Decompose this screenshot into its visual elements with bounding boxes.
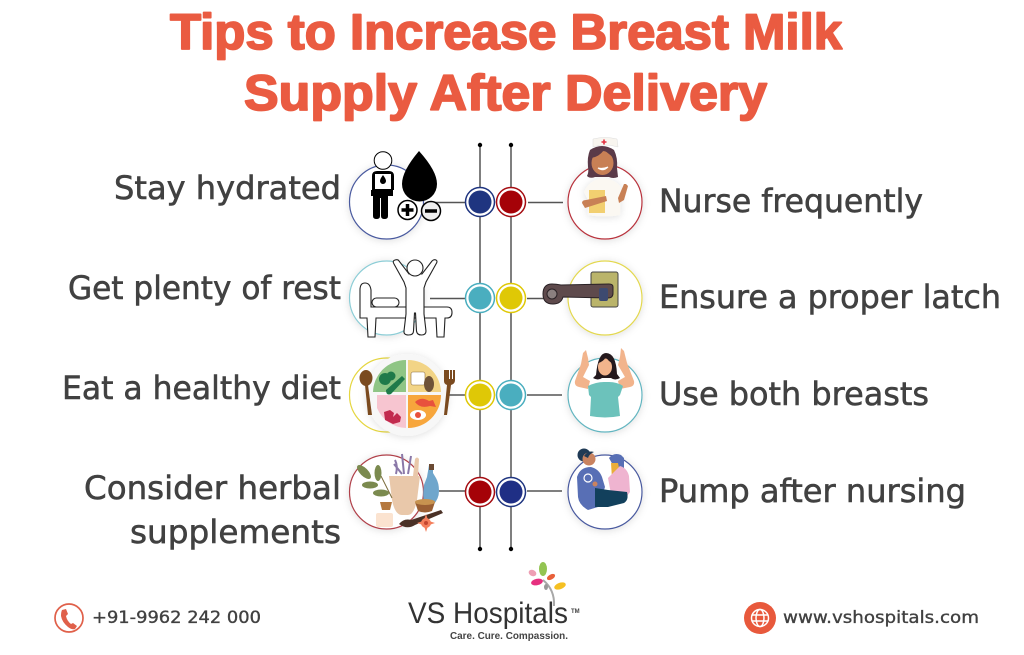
icon: herbal supplements — [350, 454, 443, 532]
website address: www.vshospitals.com — [783, 608, 979, 628]
logo: VS Hospitals: TM — [571, 609, 580, 615]
icon: nurse with patient — [568, 448, 642, 529]
connector lines and nodes — [430, 143, 563, 551]
footer: website — [744, 602, 979, 634]
right labels: Ensure a proper latch — [659, 278, 1001, 316]
footer: phone — [55, 604, 261, 632]
node: navy row 4 right — [496, 478, 526, 506]
right labels — [659, 182, 1001, 510]
logo: VS Hospitals: VS Hospitals — [408, 597, 568, 630]
node: navy top left — [466, 188, 494, 216]
title — [170, 4, 842, 121]
title: Supply After Delivery — [244, 65, 767, 121]
left labels: Eat a healthy diet — [62, 369, 341, 407]
node: teal row 3 right — [496, 380, 526, 410]
right labels: Pump after nursing — [659, 472, 966, 510]
icon: phone — [55, 604, 83, 632]
left labels: Stay hydrated — [114, 169, 341, 207]
right labels: Use both breasts — [659, 375, 929, 413]
left labels: supplements — [130, 513, 341, 551]
icon: person stretching beside bed — [350, 260, 452, 337]
icon: hydration figure and drop — [350, 151, 440, 239]
node: red top right — [496, 188, 526, 216]
node: yellow row 2 right — [496, 284, 526, 312]
right labels: Nurse frequently — [659, 182, 923, 220]
title: Tips to Increase Breast Milk — [170, 4, 842, 60]
icon: nurse — [568, 138, 642, 239]
icon: door handle latch — [543, 261, 642, 335]
node: teal row 2 left — [466, 284, 494, 312]
logo: VS Hospitals — [408, 562, 580, 642]
icon: globe — [744, 602, 776, 634]
left labels — [62, 169, 341, 551]
node: yellow row 3 left — [466, 380, 494, 410]
left labels: Get plenty of rest — [68, 269, 341, 307]
icon: healthy plate with utensils — [350, 354, 455, 436]
node: red row 4 left — [466, 478, 494, 506]
icon: woman pointing up — [568, 348, 642, 432]
phone number: +91-9962 242 000 — [92, 608, 261, 628]
logo: VS Hospitals: Care. Cure. Compassion. — [450, 630, 568, 642]
left labels: Consider herbal — [84, 469, 341, 507]
